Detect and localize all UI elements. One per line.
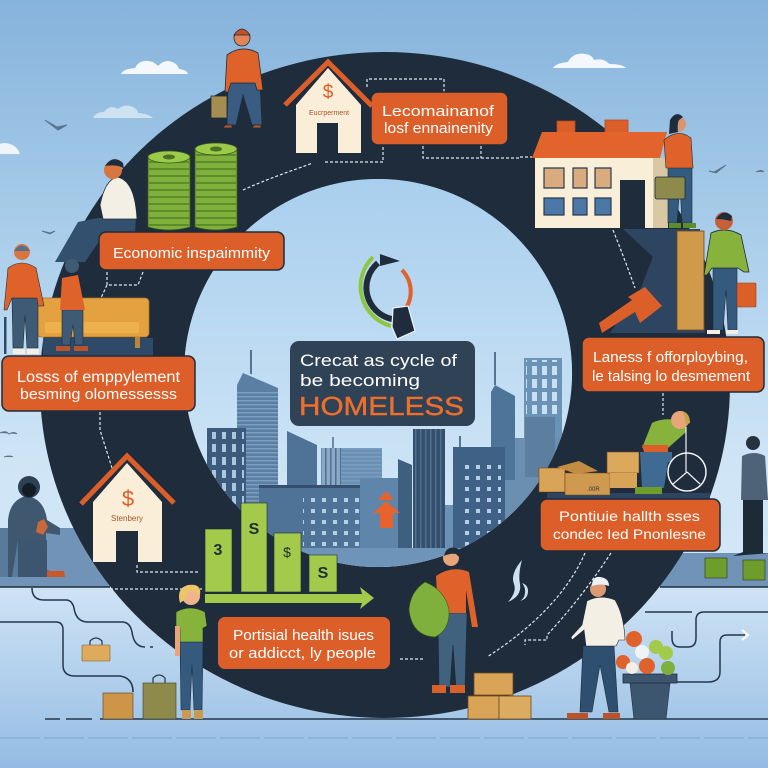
green boxes right bbox=[705, 558, 765, 580]
person in wheelchair with boxes bbox=[539, 411, 710, 499]
icon: house top with dollar bbox=[285, 62, 372, 153]
icon: up arrow on building bbox=[373, 491, 400, 528]
bar chart: S bbox=[318, 565, 329, 582]
dark ring of the cycle bbox=[40, 52, 730, 718]
center title panel: Crecat as cycle of bbox=[300, 351, 457, 370]
center title panel: HOMELESS bbox=[299, 391, 464, 421]
callout: addiction: Portisial health isues bbox=[233, 628, 374, 644]
icon: house top with dollar: $ bbox=[323, 82, 334, 103]
central skyline bbox=[184, 179, 572, 588]
house with door bbox=[532, 120, 668, 228]
people and couch group bbox=[4, 244, 153, 356]
bottom right line network bbox=[645, 612, 768, 682]
icon: stacks of money bbox=[148, 143, 237, 230]
bottom line network, bags and boxes bbox=[0, 588, 768, 719]
dashed connectors bbox=[100, 79, 663, 659]
bar chart bbox=[205, 503, 374, 609]
callout: addiction: or addicct, ly people bbox=[229, 646, 376, 662]
icon: house bottom left: Stenbery bbox=[111, 514, 143, 523]
callout: right: le talsing lo desmement bbox=[592, 369, 750, 385]
cycle icon bbox=[361, 254, 415, 339]
person: sitting in white sweater bbox=[55, 159, 137, 262]
person blonde woman bbox=[175, 585, 207, 719]
callout: top bbox=[371, 92, 508, 145]
hooded figure bottom left bbox=[0, 476, 65, 577]
ground band bbox=[0, 528, 768, 768]
older person at trash bin bbox=[567, 577, 677, 719]
callout: health bbox=[540, 499, 720, 551]
icon: house bottom left: $ bbox=[122, 486, 134, 511]
center title panel: be becoming bbox=[300, 371, 420, 390]
cardboard boxes bottom bbox=[468, 673, 531, 719]
bar chart: S bbox=[249, 521, 260, 538]
person with green bag bbox=[409, 548, 478, 693]
person with suitcase on top right bbox=[655, 114, 696, 228]
callout: top: Lecomainanof bbox=[382, 104, 495, 120]
callout: economic bbox=[99, 232, 284, 270]
callout: loss of employment bbox=[2, 356, 195, 411]
dark pedestal bbox=[610, 229, 705, 333]
person in wheelchair with boxes: .00R bbox=[587, 487, 600, 493]
callout: economic: Economic inspaimmity bbox=[113, 245, 271, 262]
callout: addiction bbox=[218, 617, 390, 669]
smell squiggle bbox=[508, 560, 528, 602]
callout: loss of employment: besming olomessesss bbox=[20, 386, 177, 403]
callout: top: losf ennainenity bbox=[384, 121, 494, 137]
callout: health: Pontiuie hallth sses bbox=[559, 508, 700, 524]
bar chart: $ bbox=[283, 544, 291, 560]
callout: right: Laness f offorploybing, bbox=[593, 350, 748, 366]
clouds and birds bbox=[0, 54, 764, 457]
center title panel bbox=[290, 341, 475, 426]
icon: house bottom left bbox=[81, 456, 174, 562]
callout: health: condec Ied Pnonlesne bbox=[553, 526, 706, 542]
callout: right bbox=[582, 337, 764, 392]
callout: loss of employment: Losss of emppylement bbox=[17, 369, 181, 386]
icon: house top with dollar: Eucrperment bbox=[309, 110, 349, 117]
arrow orange hammer bbox=[599, 287, 662, 333]
bar chart: 3 bbox=[214, 542, 223, 559]
person: top standing bbox=[211, 29, 263, 128]
person with crate right bbox=[677, 212, 756, 334]
standing silhouette right bbox=[733, 436, 768, 556]
